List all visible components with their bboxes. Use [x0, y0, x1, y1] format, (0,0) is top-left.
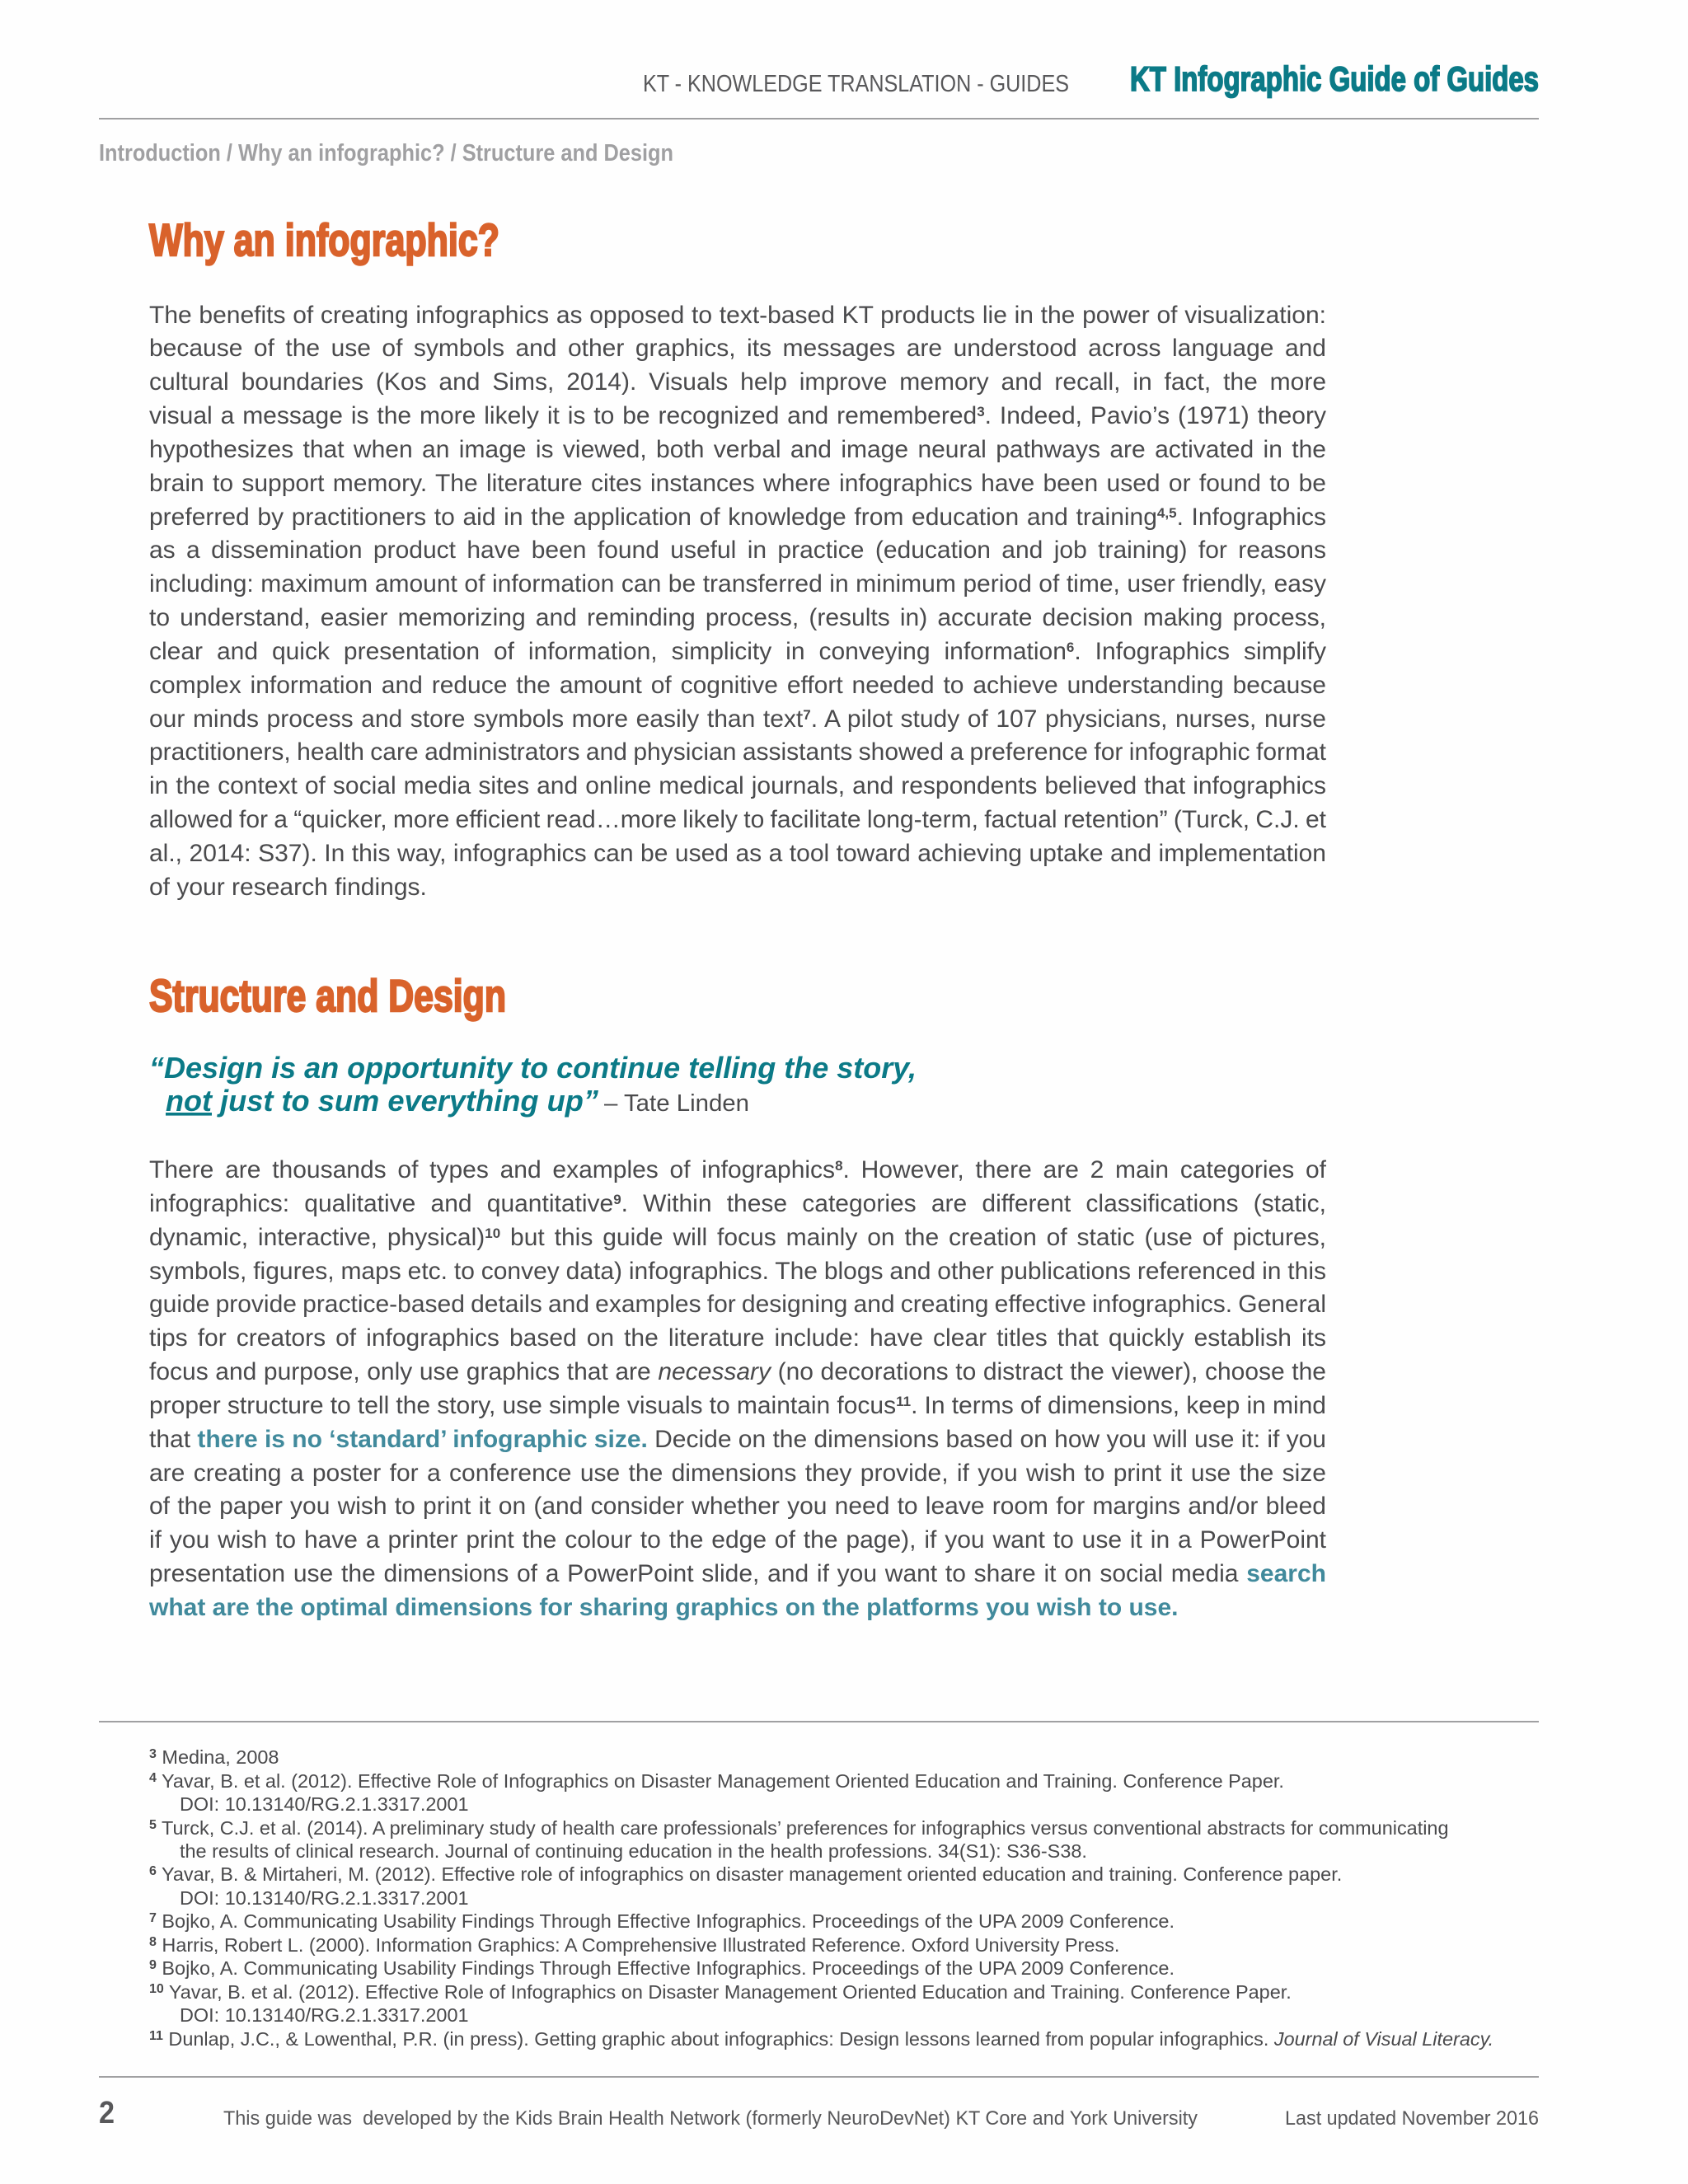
heading: why an infographic: Why an infographic?: [149, 214, 499, 265]
text block: why an infographic: complex information and reduce the amount of cognitive effort needed to achieve understanding because: [149, 672, 1326, 699]
text block: why an infographic: because of the use of symbols and other graphics, its messages are understood across language and: [149, 335, 1326, 362]
text block: structure and design: what are the optimal dimensions for sharing graphics on the platforms you wish to use.: [149, 1594, 1179, 1621]
footnotes: 3 Medina, 2008: [149, 1746, 279, 1768]
text block: why an infographic: as a dissemination product have been found useful in practice (education and job training) for reasons: [149, 537, 1326, 564]
text block: structure and design: that there is no ‘standard’ infographic size. Decide on the dimensions based on how you will use it: if you: [149, 1426, 1326, 1453]
heading: structure and design: Structure and Design: [149, 970, 506, 1021]
header title: KT Infographic Guide of Guides: [1130, 59, 1539, 98]
footnotes: 9 Bojko, A. Communicating Usability Findings Through Effective Infographics. Proceedings of the UPA 2009 Conference.: [149, 1957, 1175, 1979]
text block: structure and design: [148, 1156, 1326, 1621]
breadcrumb navigation: Introduction / Why an infographic? / Structure and Design: [99, 140, 673, 166]
quote: “Design is an opportunity to continue telling the story,: [149, 1051, 917, 1085]
footnotes: 5 Turck, C.J. et al. (2014). A preliminary study of health care professionals’ preferences for infographics versus conventional abstracts for communicating: [149, 1817, 1448, 1839]
text block: structure and design: symbols, figures, maps etc. to convey data) infographics. The blogs and other publications referenced in this: [149, 1258, 1326, 1285]
footnotes: 10 Yavar, B. et al. (2012). Effective Role of Infographics on Disaster Management Oriented Education and Training. Conference Paper.: [149, 1981, 1292, 2003]
text block: structure and design: guide provide practice-based details and examples for designing and creating effective infographics. General: [149, 1291, 1326, 1318]
footnotes: [149, 1746, 1493, 2050]
footer credit: This guide was developed by the Kids Brain Health Network (formerly NeuroDevNet) KT Core and York University: [223, 2107, 1198, 2130]
footer date: Last updated November 2016: [1285, 2107, 1539, 2130]
text block: why an infographic: practitioners, health care administrators and physician assistants showed a preference for infographic format: [149, 738, 1326, 766]
header label: KT - KNOWLEDGE TRANSLATION - GUIDES: [643, 71, 1069, 97]
footnotes: 11 Dunlap, J.C., & Lowenthal, P.R. (in press). Getting graphic about infographics: Design lessons learned from popular infographics. Journal of Visual Literacy.: [149, 2028, 1493, 2050]
text block: why an infographic: to understand, easier memorizing and reminding process, (results in) accurate decision making process,: [149, 604, 1326, 631]
text block: why an infographic: [149, 302, 1326, 901]
footnotes: 6 Yavar, B. & Mirtaheri, M. (2012). Effective role of infographics on disaster management oriented education and training. Conference paper.: [149, 1863, 1342, 1885]
quote: not: [166, 1084, 213, 1118]
quote: [149, 1051, 917, 1118]
text block: structure and design: are creating a poster for a conference use the dimensions they provide, if you wish to print it use the size: [149, 1460, 1326, 1487]
text block: why an infographic: brain to support memory. The literature cites instances where infographics have been used or found to be: [149, 470, 1326, 497]
text block: why an infographic: visual a message is the more likely it is to be recognized and remembered3. Indeed, Pavio’s (1971) theory: [149, 402, 1326, 429]
footnotes: DOI: 10.13140/RG.2.1.3317.2001: [180, 1793, 469, 1815]
footnotes: the results of clinical research. Journal of continuing education in the health professions. 34(S1): S36-S38.: [180, 1840, 1087, 1862]
text block: why an infographic: of your research findings.: [149, 874, 427, 901]
footnotes: 8 Harris, Robert L. (2000). Information Graphics: A Comprehensive Illustrated Reference. Oxford University Press.: [149, 1934, 1119, 1956]
text block: structure and design: presentation use the dimensions of a PowerPoint slide, and if you want to share it on social media search: [149, 1560, 1326, 1587]
text block: why an infographic: including: maximum amount of information can be transferred in minimum period of time, user friendly, easy: [149, 570, 1326, 598]
text block: why an infographic: preferred by practitioners to aid in the application of knowledge from education and training4,5. Infographics: [149, 504, 1326, 531]
footnotes: 4 Yavar, B. et al. (2012). Effective Role of Infographics on Disaster Management Oriented Education and Training. Conference Paper.: [149, 1770, 1284, 1792]
quote: – Tate Linden: [604, 1090, 749, 1117]
text block: why an infographic: hypothesizes that when an image is viewed, both verbal and image neural pathways are activated in the: [149, 436, 1326, 463]
quote: just to sum everything up”: [217, 1084, 598, 1118]
text block: why an infographic: al., 2014: S37). In this way, infographics can be used as a tool toward achieving uptake and implementation: [149, 840, 1326, 867]
text block: structure and design: dynamic, interactive, physical)10 but this guide will focus mainly on the creation of static (use of pictures,: [149, 1224, 1326, 1251]
text block: why an infographic: in the context of social media sites and online medical journals, and respondents believed that infographics: [149, 772, 1326, 799]
text block: structure and design: of the paper you wish to print it on (and consider whether you need to leave room for margins and/or bleed: [149, 1493, 1326, 1520]
footnotes: DOI: 10.13140/RG.2.1.3317.2001: [180, 2004, 469, 2026]
page number: 2: [99, 2096, 115, 2130]
text block: why an infographic: allowed for a “quicker, more efficient read…more likely to facilitate long-term, factual retention” (Turck, C.J. et: [149, 806, 1326, 833]
text block: why an infographic: clear and quick presentation of information, simplicity in conveying information6. Infographics simplify: [149, 638, 1326, 665]
text block: why an infographic: The benefits of creating infographics as opposed to text-based KT products lie in the power of visualization:: [149, 302, 1326, 328]
text block: structure and design: There are thousands of types and examples of infographics8. However, there are 2 main categories of: [149, 1156, 1326, 1183]
text block: why an infographic: our minds process and store symbols more easily than text7. A pilot study of 107 physicians, nurses, nurse: [149, 705, 1326, 733]
text block: structure and design: focus and purpose, only use graphics that are necessary (no decorations to distract the viewer), choose the: [149, 1358, 1326, 1385]
footnotes: 7 Bojko, A. Communicating Usability Findings Through Effective Infographics. Proceedings of the UPA 2009 Conference.: [149, 1910, 1175, 1932]
footnotes: DOI: 10.13140/RG.2.1.3317.2001: [180, 1887, 469, 1909]
text block: structure and design: tips for creators of infographics based on the literature include: have clear titles that quickly establish its: [149, 1324, 1326, 1352]
text block: structure and design: infographics: qualitative and quantitative9. Within these categories are different classifications (static,: [149, 1190, 1326, 1217]
text block: structure and design: proper structure to tell the story, use simple visuals to maintain focus11. In terms of dimensions, keep in mind: [149, 1392, 1326, 1419]
text block: structure and design: if you wish to have a printer print the colour to the edge of the page), if you want to use it in a PowerPoint: [149, 1526, 1326, 1554]
text block: why an infographic: cultural boundaries (Kos and Sims, 2014). Visuals help improve memory and recall, in fact, the more: [149, 368, 1326, 396]
